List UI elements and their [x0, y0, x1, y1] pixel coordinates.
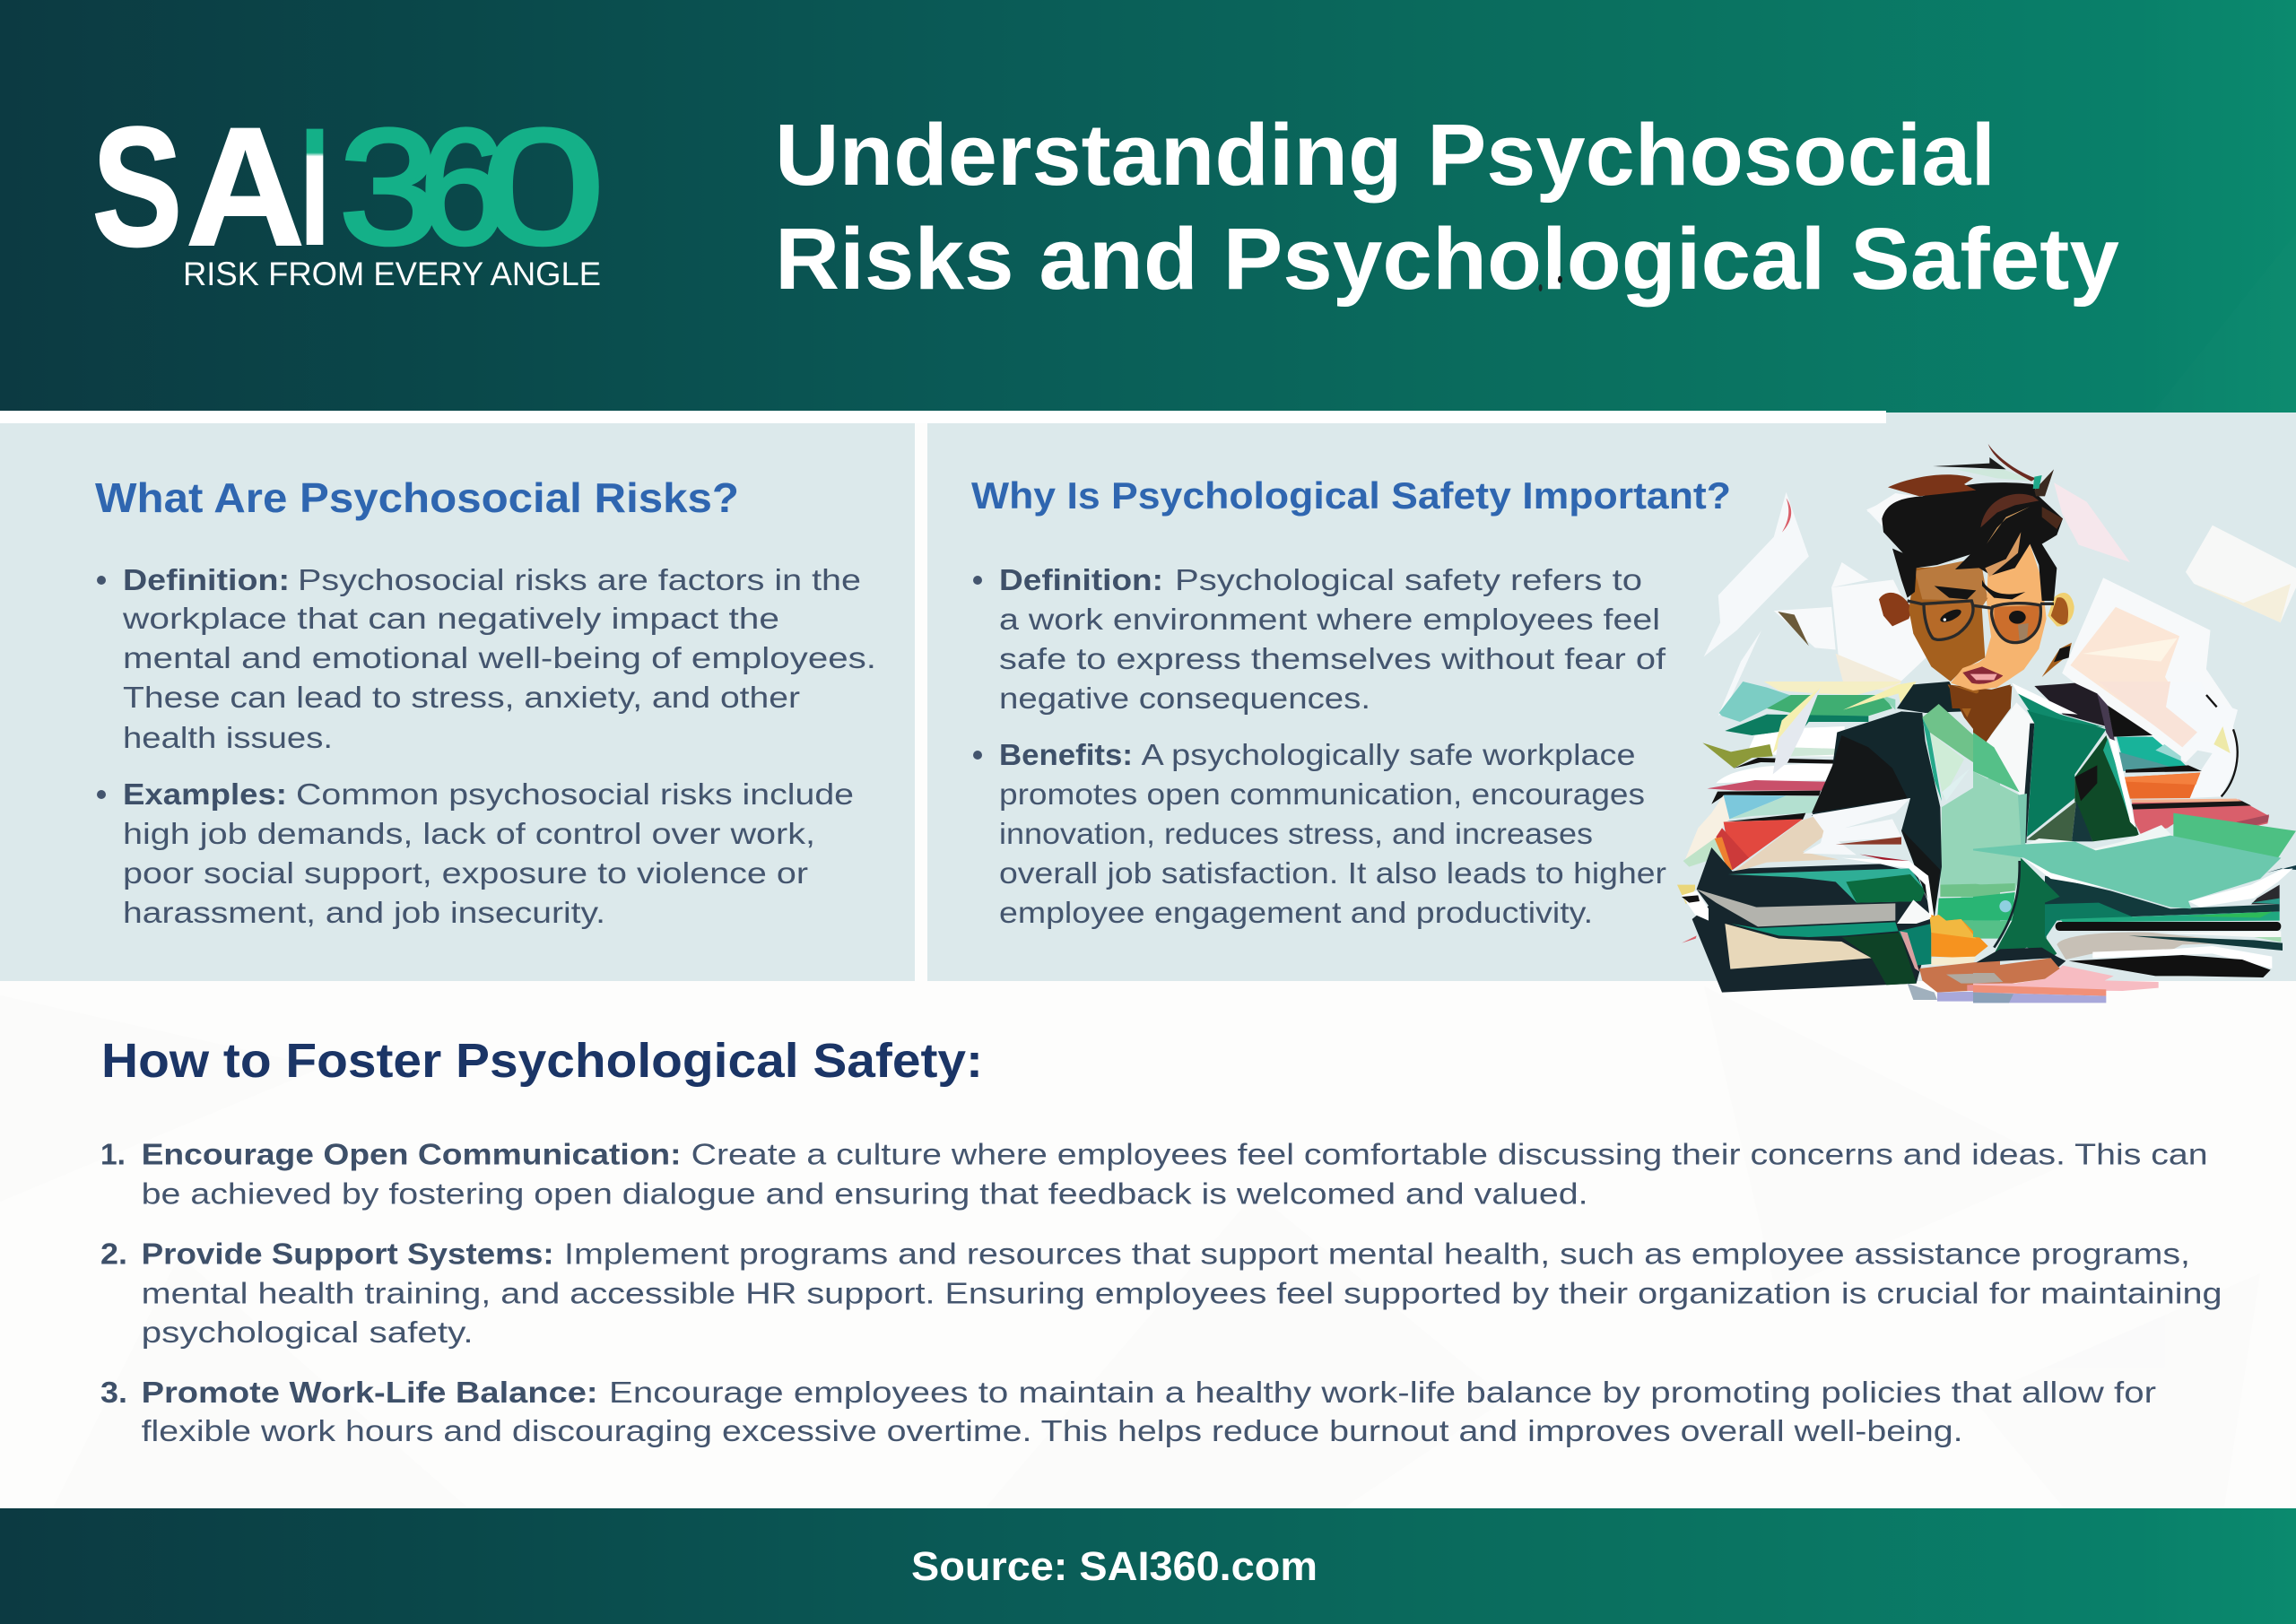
item 2: [100, 1238, 2222, 1350]
flying papers: [1704, 482, 2296, 762]
definition bullet: Psychological safety refers to: [1175, 564, 1642, 597]
footer source text: Source: SAI360.com: [911, 1543, 1318, 1589]
illustration: stressed worker with piles of paper: [1677, 444, 2296, 1003]
definition bullet: These can lead to stress, anxiety, and other: [123, 682, 800, 715]
definition bullet: [973, 564, 1666, 716]
definition bullet: mental and emotional well-being of employees.: [123, 642, 876, 675]
logo: SAI360: [92, 92, 604, 292]
panel: why is psychological safety important: [927, 413, 2296, 981]
logo: SAI360: RISK FROM EVERY ANGLE: [183, 256, 601, 292]
header band: [0, 0, 2296, 413]
definition bullet: negative consequences.: [999, 682, 1370, 716]
right book stack, jacket and green papers: [1973, 682, 2296, 1003]
heading: why is psychological safety important: Why Is Psychological Safety Important?: [971, 474, 1731, 517]
benefits bullet: A psychologically safe workplace: [1141, 739, 1636, 772]
logo: SAI360: A: [186, 92, 305, 281]
definition bullet: safe to express themselves without fear of: [999, 643, 1666, 676]
section: how to foster psychological safety: [100, 1034, 2222, 1448]
footer band: [0, 1508, 2296, 1624]
item 2: Provide Support Systems:: [142, 1238, 554, 1272]
worker head: [1867, 444, 2074, 708]
item 2: psychological safety.: [142, 1316, 474, 1350]
item 3: [100, 1376, 2156, 1448]
logo: SAI360: S: [92, 92, 182, 281]
title: Risks and Psychological Safety: [775, 210, 2119, 308]
examples bullet: Common psychosocial risks include: [296, 778, 854, 812]
item 3: flexible work hours and discouraging excessive overtime. This helps reduce burnout and improves overall well-being.: [142, 1415, 1963, 1448]
examples bullet: [97, 778, 854, 930]
examples bullet: poor social support, exposure to violence or: [123, 857, 808, 890]
definition bullet: [97, 564, 876, 755]
definition bullet: workplace that can negatively impact the: [122, 603, 779, 636]
logo: SAI360: 0: [482, 95, 604, 278]
definition bullet: Definition:: [123, 564, 290, 597]
item 1: Create a culture where employees feel comfortable discussing their concerns and ideas. This can: [691, 1139, 2208, 1171]
title: [775, 106, 2119, 308]
definition bullet: Psychosocial risks are factors in the: [298, 564, 861, 597]
section: lower background facets: [0, 986, 2260, 1507]
benefits bullet: innovation, reduces stress, and increases: [999, 818, 1593, 851]
examples bullet: high job demands, lack of control over work,: [123, 818, 815, 851]
item 1: 1.: [100, 1139, 126, 1171]
item 2: 2.: [100, 1238, 127, 1272]
item 2: mental health training, and accessible HR support. Ensuring employees feel supported by their organization is crucial for maintaining: [142, 1278, 2222, 1311]
left book stack and jacket: [1677, 682, 2000, 1002]
benefits bullet: [973, 739, 1666, 930]
heading: how to foster psychological safety: How to Foster Psychological Safety:: [101, 1034, 983, 1088]
benefits bullet: employee engagement and productivity.: [999, 897, 1593, 930]
white divider strip: [0, 411, 1886, 423]
item 1: be achieved by fostering open dialogue and ensuring that feedback is welcomed and valued.: [142, 1178, 1588, 1211]
benefits bullet: Benefits:: [999, 739, 1133, 772]
item 3: 3.: [100, 1376, 127, 1410]
benefits bullet: overall job satisfaction. It also leads to higher: [999, 857, 1666, 890]
item 1: [100, 1139, 2208, 1211]
benefits bullet: promotes open communication, encourages: [999, 778, 1645, 812]
examples bullet: harassment, and job insecurity.: [123, 897, 605, 930]
logo: SAI360: 3: [339, 95, 439, 278]
item 3: Encourage employees to maintain a healthy work-life balance by promoting policies that allow for: [609, 1376, 2156, 1410]
definition bullet: a work environment where employees feel: [999, 604, 1660, 637]
definition bullet: health issues.: [123, 722, 333, 755]
panel: what are psychosocial risks: [0, 423, 915, 981]
heading: what are psychosocial risks: What Are Psychosocial Risks?: [95, 474, 739, 521]
item 3: Promote Work-Life Balance:: [142, 1376, 598, 1410]
item 2: Implement programs and resources that support mental health, such as employee assistance programs,: [564, 1238, 2190, 1272]
examples bullet: Examples:: [123, 778, 287, 812]
definition bullet: Definition:: [999, 564, 1163, 597]
logo: SAI360: I: [299, 92, 331, 281]
item 1: Encourage Open Communication:: [142, 1139, 682, 1171]
title: Understanding Psychosocial: [775, 106, 1996, 204]
logo: SAI360: 6: [420, 95, 506, 278]
